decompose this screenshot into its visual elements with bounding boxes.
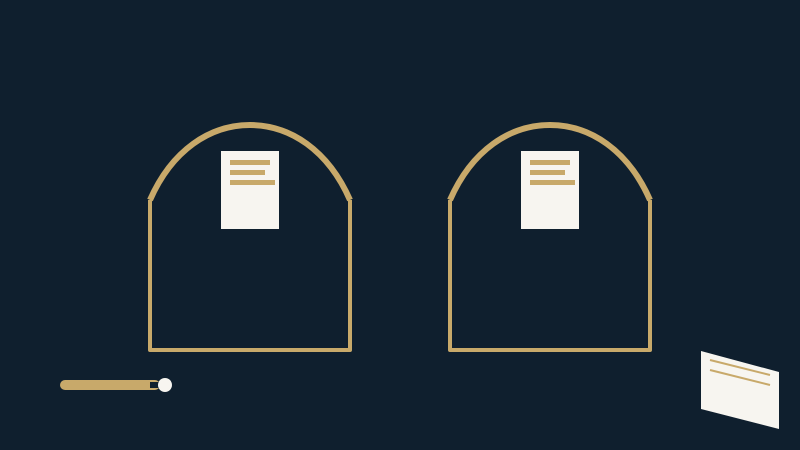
pen tip <box>158 378 172 392</box>
pen collar <box>150 382 160 388</box>
document: left <box>221 151 279 229</box>
pen barrel <box>60 380 160 390</box>
document sheet <box>221 151 279 229</box>
text line 1 <box>230 160 270 165</box>
sheet line 1 <box>710 360 770 375</box>
arch top curve <box>150 125 350 200</box>
text line 1 <box>530 160 570 165</box>
text line 2 <box>230 170 265 175</box>
sheet line 2 <box>710 370 770 385</box>
arch top curve <box>450 125 650 200</box>
sheet <box>701 351 779 429</box>
arch body <box>450 200 650 350</box>
document: right <box>521 151 579 229</box>
text line 3 <box>530 180 575 185</box>
text line 2 <box>530 170 565 175</box>
panel: left arch <box>150 125 350 350</box>
arch body <box>150 200 350 350</box>
panel: right arch <box>450 125 650 350</box>
text line 3 <box>230 180 275 185</box>
document sheet <box>521 151 579 229</box>
icon: tilted sheet <box>701 351 779 429</box>
icon: pen <box>60 378 172 392</box>
